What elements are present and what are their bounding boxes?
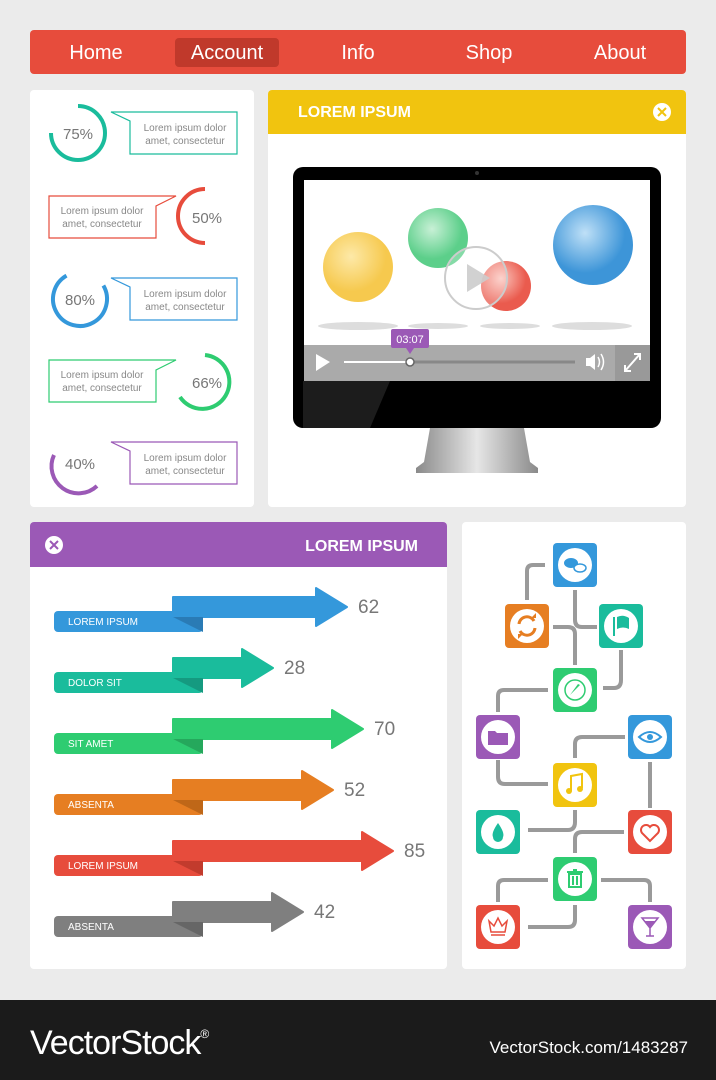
bar 70: 70 [374,719,395,740]
donut 66%: 66% [192,375,222,392]
panel: arrow bars [30,522,447,969]
video header [268,90,686,134]
bar 28 [54,649,305,693]
donut 75%: Lorem ipsum dolor [144,123,227,134]
bar 52: ABSENTA [68,800,114,811]
donut 40%: Lorem ipsum dolor [144,453,227,464]
icon: compass [553,668,597,712]
icon: cocktail [628,905,672,949]
bar 42: 42 [314,902,335,923]
nav bar: Home [69,42,123,64]
bar 62 [54,588,379,632]
icon: drop [476,810,520,854]
footer: VectorStock [30,1024,200,1062]
donut 50%: amet, consectetur [62,219,142,230]
footer: VectorStock.com/1483287 [490,1038,688,1057]
donut 40%: amet, consectetur [145,466,225,477]
donut 40% [52,442,237,493]
panel: percentages [30,90,254,507]
monitor [293,167,661,473]
nav bar: Info [341,42,375,64]
bars header [30,522,447,567]
bar 85: LOREM IPSUM [68,861,138,872]
bar 28: 28 [284,658,305,679]
bar 70: SIT AMET [68,739,113,750]
icon: folder [476,715,520,759]
bar 52 [54,771,365,815]
bar 62: LOREM IPSUM [68,617,138,628]
donut 75% [51,106,237,160]
nav bar: About [594,42,647,64]
bar 85 [54,832,425,876]
donut 80%: amet, consectetur [145,302,225,313]
icon: music [553,763,597,807]
icon: eye [628,715,672,759]
icon: trash [553,857,597,901]
icon: heart [628,810,672,854]
donut 75%: 75% [63,126,93,143]
icon: flag [599,604,643,648]
donut 40%: 40% [65,456,95,473]
donut 80%: 80% [65,292,95,309]
bar 62: 62 [358,597,379,618]
icon: crown [476,905,520,949]
donut 80% [43,262,237,336]
donut 66% [49,355,229,409]
bar 28: DOLOR SIT [68,678,122,689]
bar 85: 85 [404,841,425,862]
donut 66%: amet, consectetur [62,383,142,394]
monitor: 03:07 [396,334,424,346]
donut 66%: Lorem ipsum dolor [61,370,144,381]
panel: icon network [462,522,686,969]
icon: chat [553,543,597,587]
donut 75%: amet, consectetur [145,136,225,147]
bars header: LOREM IPSUM [305,538,418,555]
donut 80%: Lorem ipsum dolor [144,289,227,300]
nav bar: Account [191,42,264,64]
donut 50%: 50% [192,210,222,227]
icon: refresh [505,604,549,648]
footer [0,1000,716,1080]
bar 42: ABSENTA [68,922,114,933]
panel: video [268,90,686,507]
donut 50%: Lorem ipsum dolor [61,206,144,217]
bar 52: 52 [344,780,365,801]
donut 50% [49,189,222,243]
nav bar [30,30,686,74]
footer: ® [200,1027,209,1041]
bar 70 [54,710,395,754]
bar 42 [54,893,335,937]
nav bar: Shop [466,42,512,64]
video header: LOREM IPSUM [298,104,411,121]
connectors [498,565,650,927]
